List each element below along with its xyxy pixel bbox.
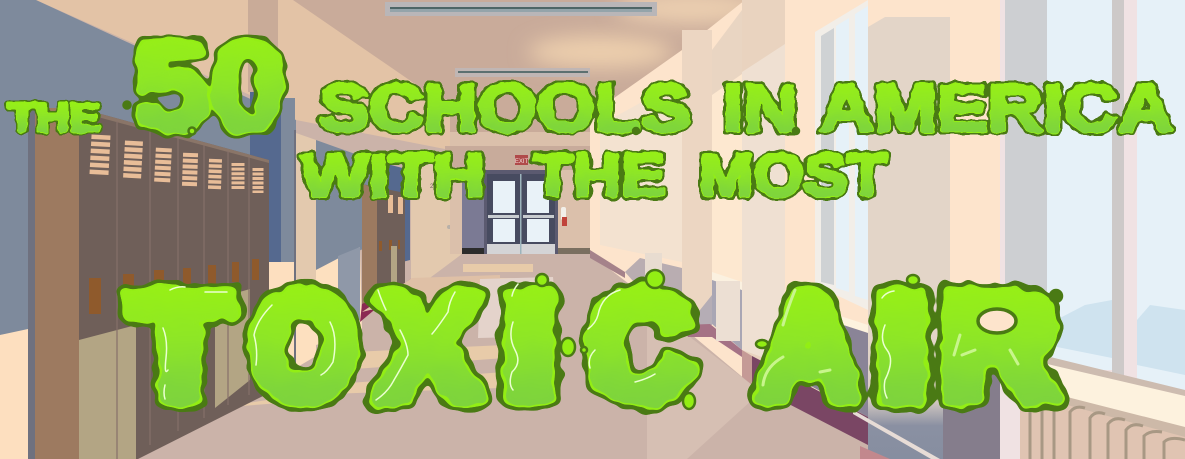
toxic air: R bbox=[941, 265, 1057, 429]
with the most: MOST bbox=[699, 142, 887, 209]
window bbox=[1000, 0, 1185, 459]
left wall bbox=[0, 0, 296, 459]
classroom door: 203 bbox=[430, 184, 441, 190]
toxic air bbox=[130, 265, 1057, 429]
toxic air: A bbox=[759, 265, 859, 429]
floor details bbox=[142, 254, 868, 459]
far lockers bbox=[360, 184, 412, 322]
50: 50 bbox=[134, 17, 286, 156]
slime drips bbox=[124, 102, 1062, 409]
50: 50 bbox=[134, 17, 286, 156]
with the most: THE bbox=[533, 142, 665, 209]
toxic air: O bbox=[252, 265, 356, 429]
with the most: THE bbox=[533, 142, 665, 209]
toxic air: T bbox=[130, 265, 230, 429]
toxic air: T bbox=[130, 265, 230, 429]
schools in america: IN bbox=[722, 71, 798, 146]
with the most: WITH bbox=[301, 142, 485, 209]
radiator bbox=[1020, 403, 1185, 459]
schools in america: SCHOOLS bbox=[319, 71, 691, 146]
with the most bbox=[301, 142, 887, 209]
with the most: THE bbox=[533, 142, 665, 209]
schools in america: AMERICA bbox=[819, 71, 1173, 146]
with the most: WITH bbox=[301, 142, 485, 209]
toxic air: A bbox=[759, 265, 859, 429]
the: THE bbox=[8, 96, 100, 140]
baseboard and lower corridor wall bbox=[590, 250, 940, 459]
fire extinguisher bbox=[561, 207, 567, 226]
schools in america: SCHOOLS bbox=[319, 71, 691, 146]
ceiling bbox=[36, 0, 765, 150]
classroom door bbox=[411, 152, 461, 283]
50: 50 bbox=[134, 17, 286, 156]
locker vents bbox=[99, 135, 258, 193]
toxic air: R bbox=[941, 265, 1057, 429]
toxic air: I bbox=[504, 265, 556, 429]
toxic air: I bbox=[876, 265, 928, 429]
toxic air: T bbox=[130, 265, 230, 429]
locker handles bbox=[89, 259, 259, 314]
schools in america bbox=[319, 71, 1173, 146]
exit sign: EXIT bbox=[515, 159, 528, 165]
exit sign bbox=[515, 155, 528, 165]
toxic air: O bbox=[252, 265, 356, 429]
near lockers bbox=[35, 108, 269, 459]
window sill bbox=[1020, 352, 1185, 440]
toxic air: I bbox=[876, 265, 928, 429]
with the most: MOST bbox=[699, 142, 887, 209]
the: THE bbox=[8, 96, 100, 140]
schools in america: AMERICA bbox=[819, 71, 1173, 146]
counter of letter R bbox=[978, 309, 1016, 333]
toxic air: I bbox=[504, 265, 556, 429]
double doors bbox=[484, 170, 558, 254]
toxic air: A bbox=[759, 265, 859, 429]
toxic air: X bbox=[376, 265, 480, 429]
toxic air: C bbox=[588, 265, 692, 429]
toxic air: X bbox=[376, 265, 480, 429]
schools in america: IN bbox=[722, 71, 798, 146]
schools in america: IN bbox=[722, 71, 798, 146]
mid-left wall section bbox=[296, 133, 410, 400]
pale slime glints bbox=[763, 290, 1018, 385]
right corridor wall bbox=[590, 0, 1003, 459]
toxic air: C bbox=[588, 265, 692, 429]
end of corridor bbox=[445, 132, 600, 254]
toxic air: X bbox=[376, 265, 480, 429]
the: THE bbox=[8, 96, 100, 140]
with the most: WITH bbox=[301, 142, 485, 209]
toxic air: I bbox=[876, 265, 928, 429]
toxic air: O bbox=[252, 265, 356, 429]
slime highlights bbox=[163, 284, 894, 400]
schools in america: AMERICA bbox=[819, 71, 1173, 146]
ceiling lights bbox=[385, 2, 657, 77]
toxic air: I bbox=[504, 265, 556, 429]
with the most: MOST bbox=[699, 142, 887, 209]
schools in america: SCHOOLS bbox=[319, 71, 691, 146]
toxic air: R bbox=[941, 265, 1057, 429]
toxic air: C bbox=[588, 265, 692, 429]
